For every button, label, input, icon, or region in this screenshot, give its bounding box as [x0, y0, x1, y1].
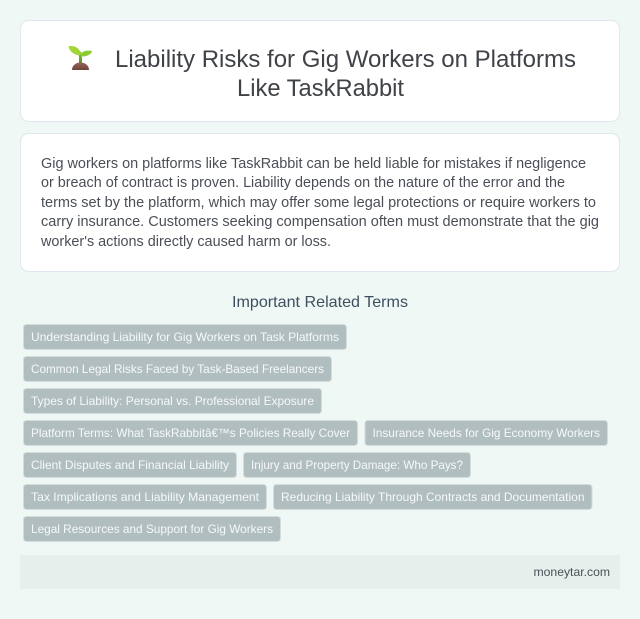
tag: reducing liability: Reducing Liability Through Contracts and Documentation — [281, 490, 584, 504]
tag: client disputes — [24, 452, 236, 478]
tag: tax implications: Tax Implications and Liability Management — [31, 490, 260, 504]
tag: insurance needs: Insurance Needs for Gig Economy Workers — [372, 426, 600, 440]
title: Liability Risks for Gig Workers on Platforms — [115, 46, 576, 73]
tag: understanding liability — [24, 324, 346, 350]
tag: common legal risks — [24, 356, 332, 382]
tag: legal resources — [24, 516, 280, 542]
tag: types of liability: Types of Liability: Personal vs. Professional Exposure — [31, 394, 314, 408]
tag: platform terms — [24, 420, 358, 446]
summary text: worker's actions directly caused harm or loss. — [40, 234, 331, 250]
tag: tax implications — [24, 484, 266, 510]
footer source: moneytar.com — [534, 565, 610, 579]
tag: client disputes: Client Disputes and Financial Liability — [31, 458, 229, 472]
panel: title card — [20, 20, 620, 122]
tag: types of liability — [24, 388, 322, 414]
tag: injury and property damage — [244, 452, 470, 478]
tag list — [24, 324, 608, 542]
tag: legal resources: Legal Resources and Support for Gig Workers — [31, 522, 273, 536]
heading: important related terms: Important Related Terms — [232, 294, 408, 311]
icon: seedling — [68, 46, 92, 70]
tag: understanding liability: Understanding Liability for Gig Workers on Task Platforms — [31, 330, 339, 344]
summary text: or breach of contract is proven. Liability depends on the nature of the error and the — [41, 175, 565, 191]
tag: insurance needs — [365, 420, 608, 446]
title: Like TaskRabbit — [237, 75, 404, 102]
tag: common legal risks: Common Legal Risks Faced by Task-Based Freelancers — [31, 362, 324, 376]
tag: reducing liability — [274, 484, 592, 510]
panel: summary card — [20, 134, 620, 272]
summary text — [40, 156, 599, 250]
tag: platform terms: Platform Terms: What TaskRabbitâ€™s Policies Really Cover — [31, 426, 350, 440]
title — [115, 46, 576, 102]
tag: injury and property damage: Injury and Property Damage: Who Pays? — [251, 458, 463, 472]
summary text: carry insurance. Customers seeking compensation often must demonstrate that the gig — [41, 214, 599, 230]
summary text: Gig workers on platforms like TaskRabbit can be held liable for mistakes if negligence — [41, 156, 586, 172]
summary text: terms set by the platform, which may offer some legal protections or require workers to — [41, 195, 596, 211]
footer — [20, 555, 620, 589]
